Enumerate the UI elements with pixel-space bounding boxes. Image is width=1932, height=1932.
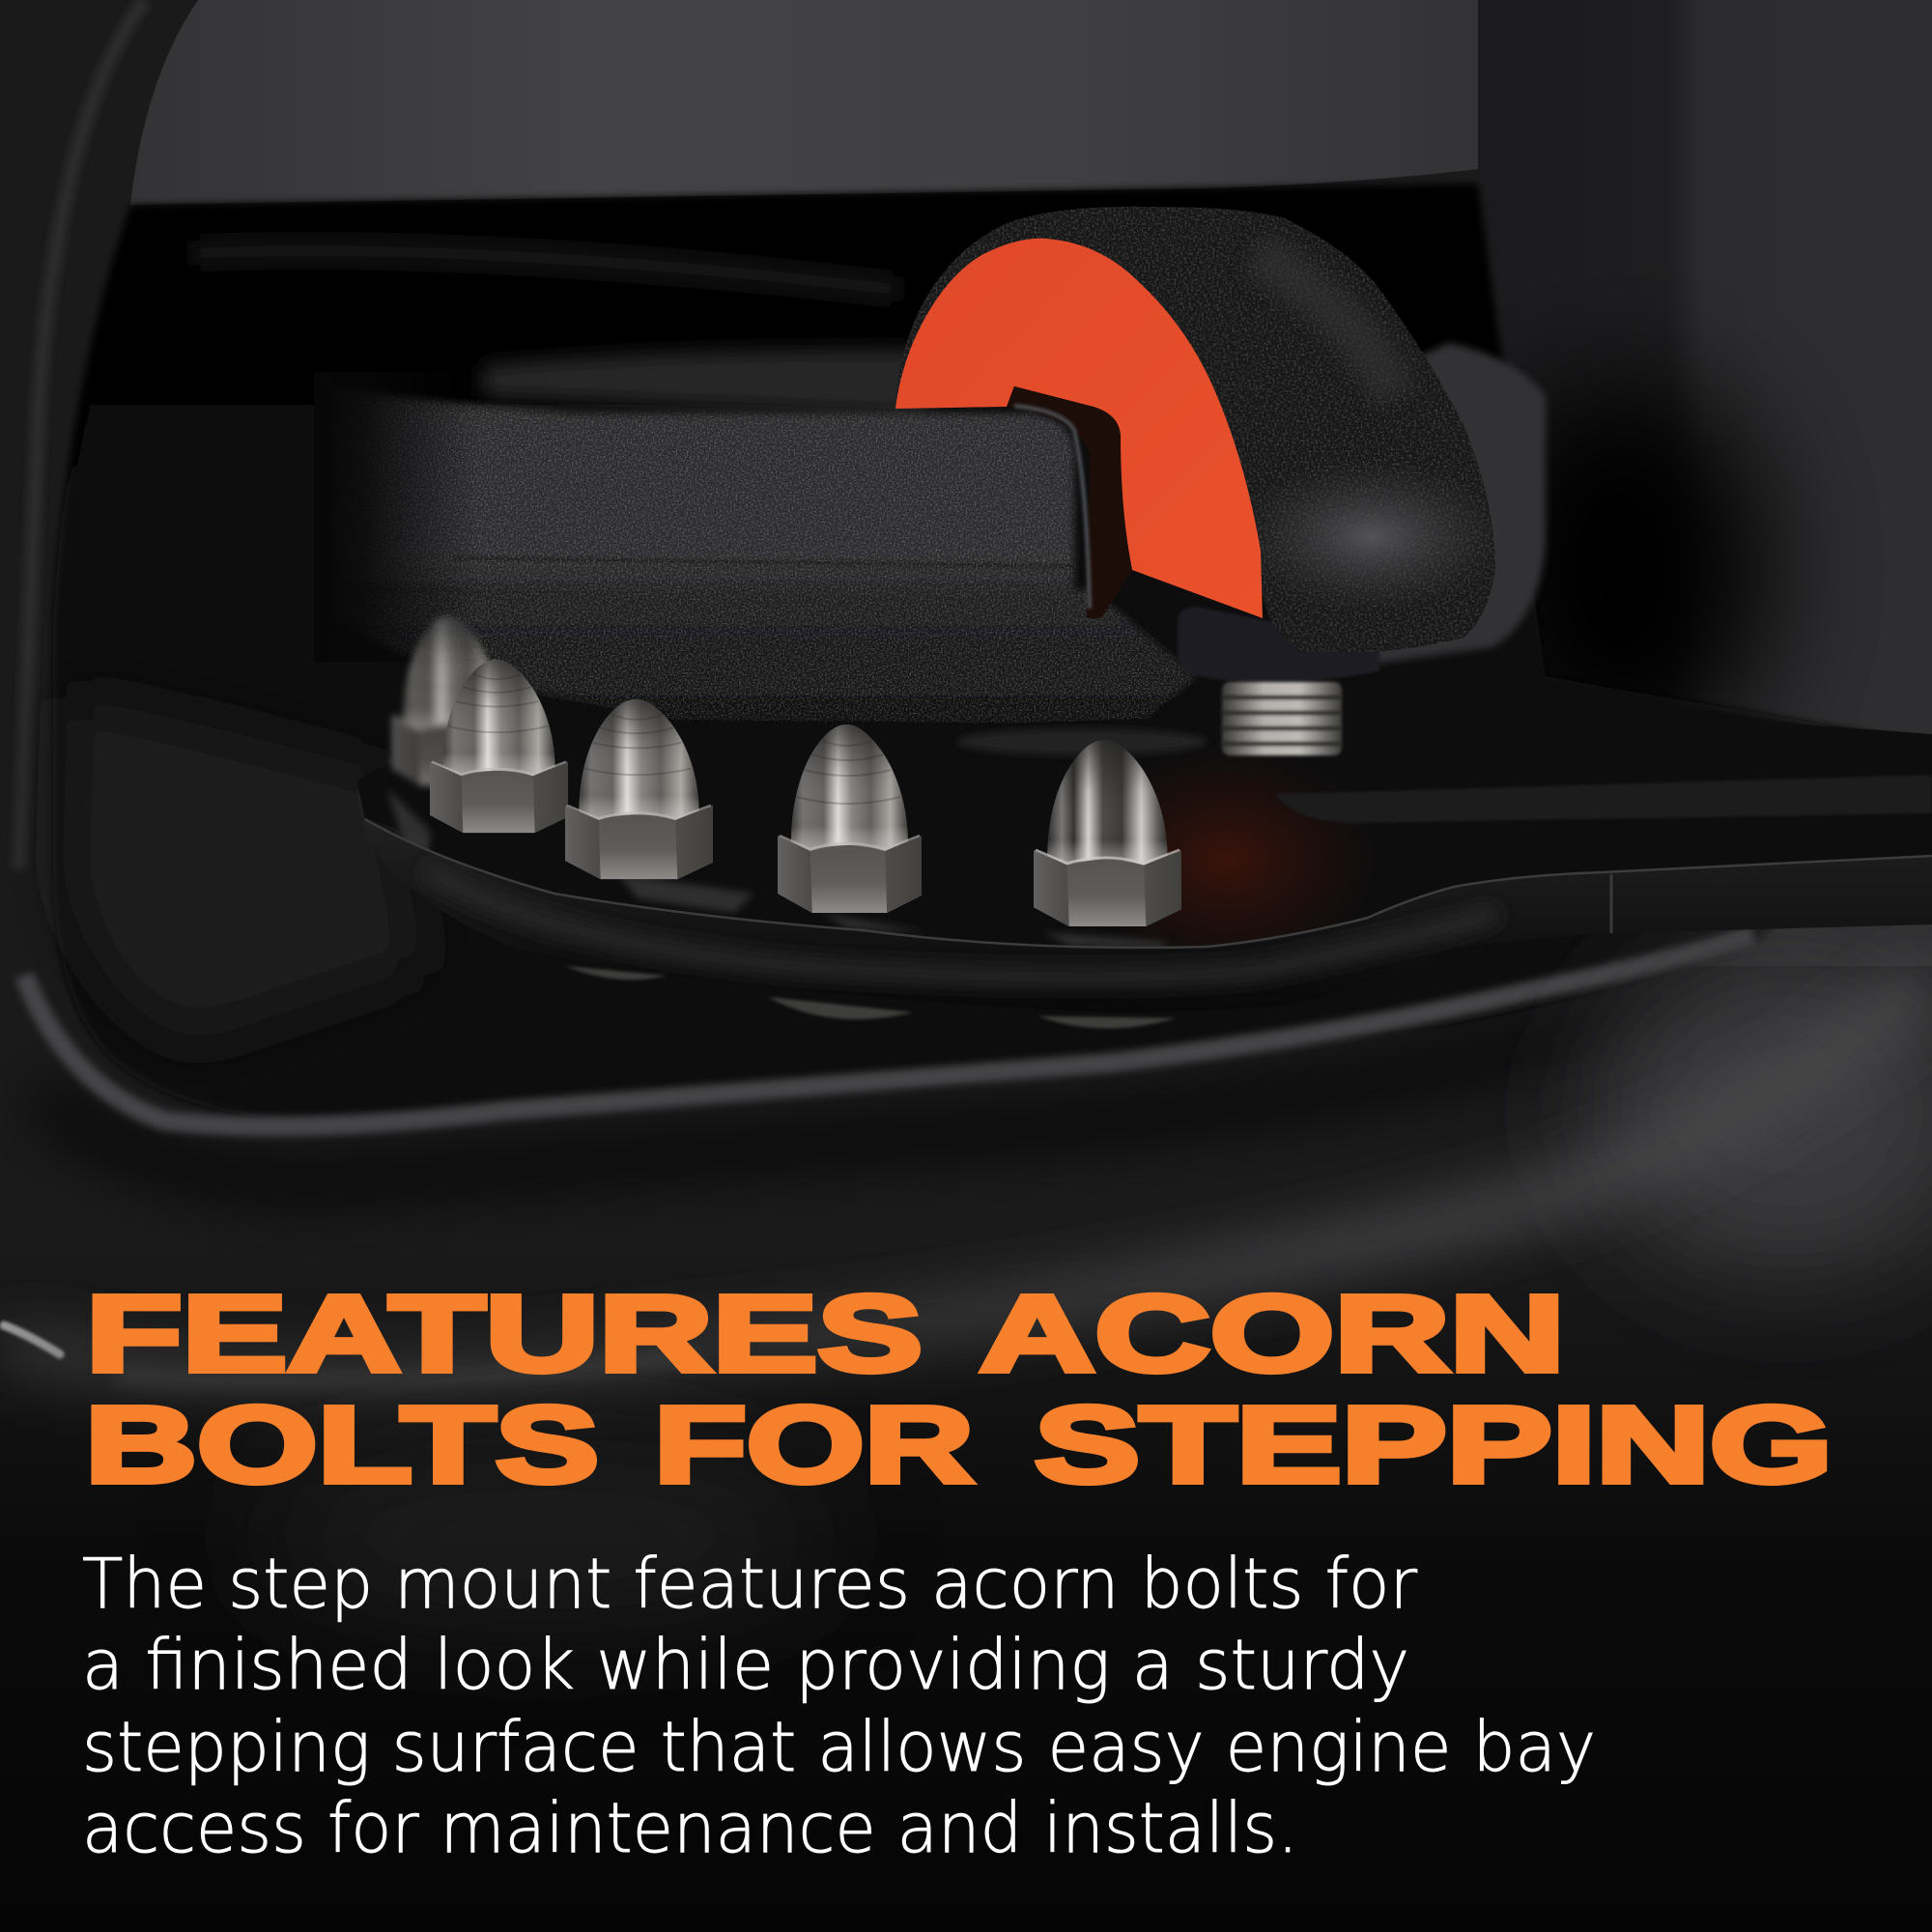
edge top rim light <box>365 819 1932 948</box>
plate hole glare <box>956 728 1208 755</box>
bolt reflections on plate <box>386 787 1169 949</box>
dark recess behind bracket <box>53 184 1932 1122</box>
title: FEATURES <box>86 1273 923 1394</box>
upper grey wall <box>130 0 1478 205</box>
edge sheen <box>425 869 1497 977</box>
acorn bolt 1 <box>430 660 568 833</box>
foam lower layer <box>333 589 1198 724</box>
body glow right <box>1594 947 1932 1275</box>
grey liner strip <box>1014 406 1090 609</box>
strap embossed lettering band <box>1256 253 1396 396</box>
foam cut end <box>1007 386 1132 618</box>
strap lit patch <box>1236 459 1507 613</box>
right side panel <box>1478 0 1932 966</box>
arm raised rib <box>1275 775 1932 823</box>
body text: access for maintenance and installs. <box>82 1788 1298 1868</box>
acorn bolts <box>391 616 1181 926</box>
rim shadow <box>39 985 1739 1183</box>
recess upper soft streaks <box>193 251 898 290</box>
thin sheen under title <box>116 1357 696 1381</box>
strap handle <box>895 207 1507 653</box>
orange inner face <box>895 239 1263 618</box>
bright spec at left edge <box>4 1325 60 1354</box>
acorn bolt 2 <box>565 699 713 879</box>
acorn bolt 3 <box>778 724 922 913</box>
stud thread <box>1221 682 1343 755</box>
title: FOR <box>654 1384 974 1505</box>
body text: a finished look while providing a sturdy <box>82 1625 1409 1705</box>
red reflection on plate <box>1072 744 1381 976</box>
recess upper ring <box>483 350 927 415</box>
body text <box>82 1544 1596 1868</box>
strap black body <box>895 207 1495 653</box>
under bolt tips <box>565 966 1177 1029</box>
recess lower rim highlight <box>24 935 1753 1126</box>
body text: stepping surface that allows easy engine bay <box>82 1707 1596 1787</box>
title: STEPPING <box>1035 1384 1833 1505</box>
edge seam <box>1609 874 1613 933</box>
bottom fade <box>0 1236 1932 1932</box>
threaded stud <box>1178 607 1379 755</box>
body lower sheen <box>0 976 1932 1378</box>
plate top surface <box>357 705 1932 949</box>
foam left fade <box>314 372 478 662</box>
stud rubber washer <box>1178 607 1379 682</box>
body text: The step mount features acorn bolts for <box>82 1544 1418 1624</box>
title: BOLTS <box>85 1384 599 1505</box>
lower haze <box>251 1449 831 1623</box>
acorn bolt 4 <box>1034 740 1181 926</box>
foam seam line <box>454 558 1074 566</box>
acorn bolt: rear, out of focus <box>391 616 510 785</box>
foam upper layer <box>333 386 1074 609</box>
foam ring pad <box>333 386 1198 724</box>
step bracket plate <box>357 705 1932 1029</box>
plate front edge <box>357 787 1932 1012</box>
dark shadow on right panel <box>1478 377 1768 763</box>
lower left recess lip <box>63 696 425 1043</box>
title <box>85 1273 1833 1505</box>
left frame band <box>19 0 145 869</box>
panel: rear clip behind strap <box>1352 343 1546 667</box>
title: ACORN <box>980 1273 1565 1394</box>
